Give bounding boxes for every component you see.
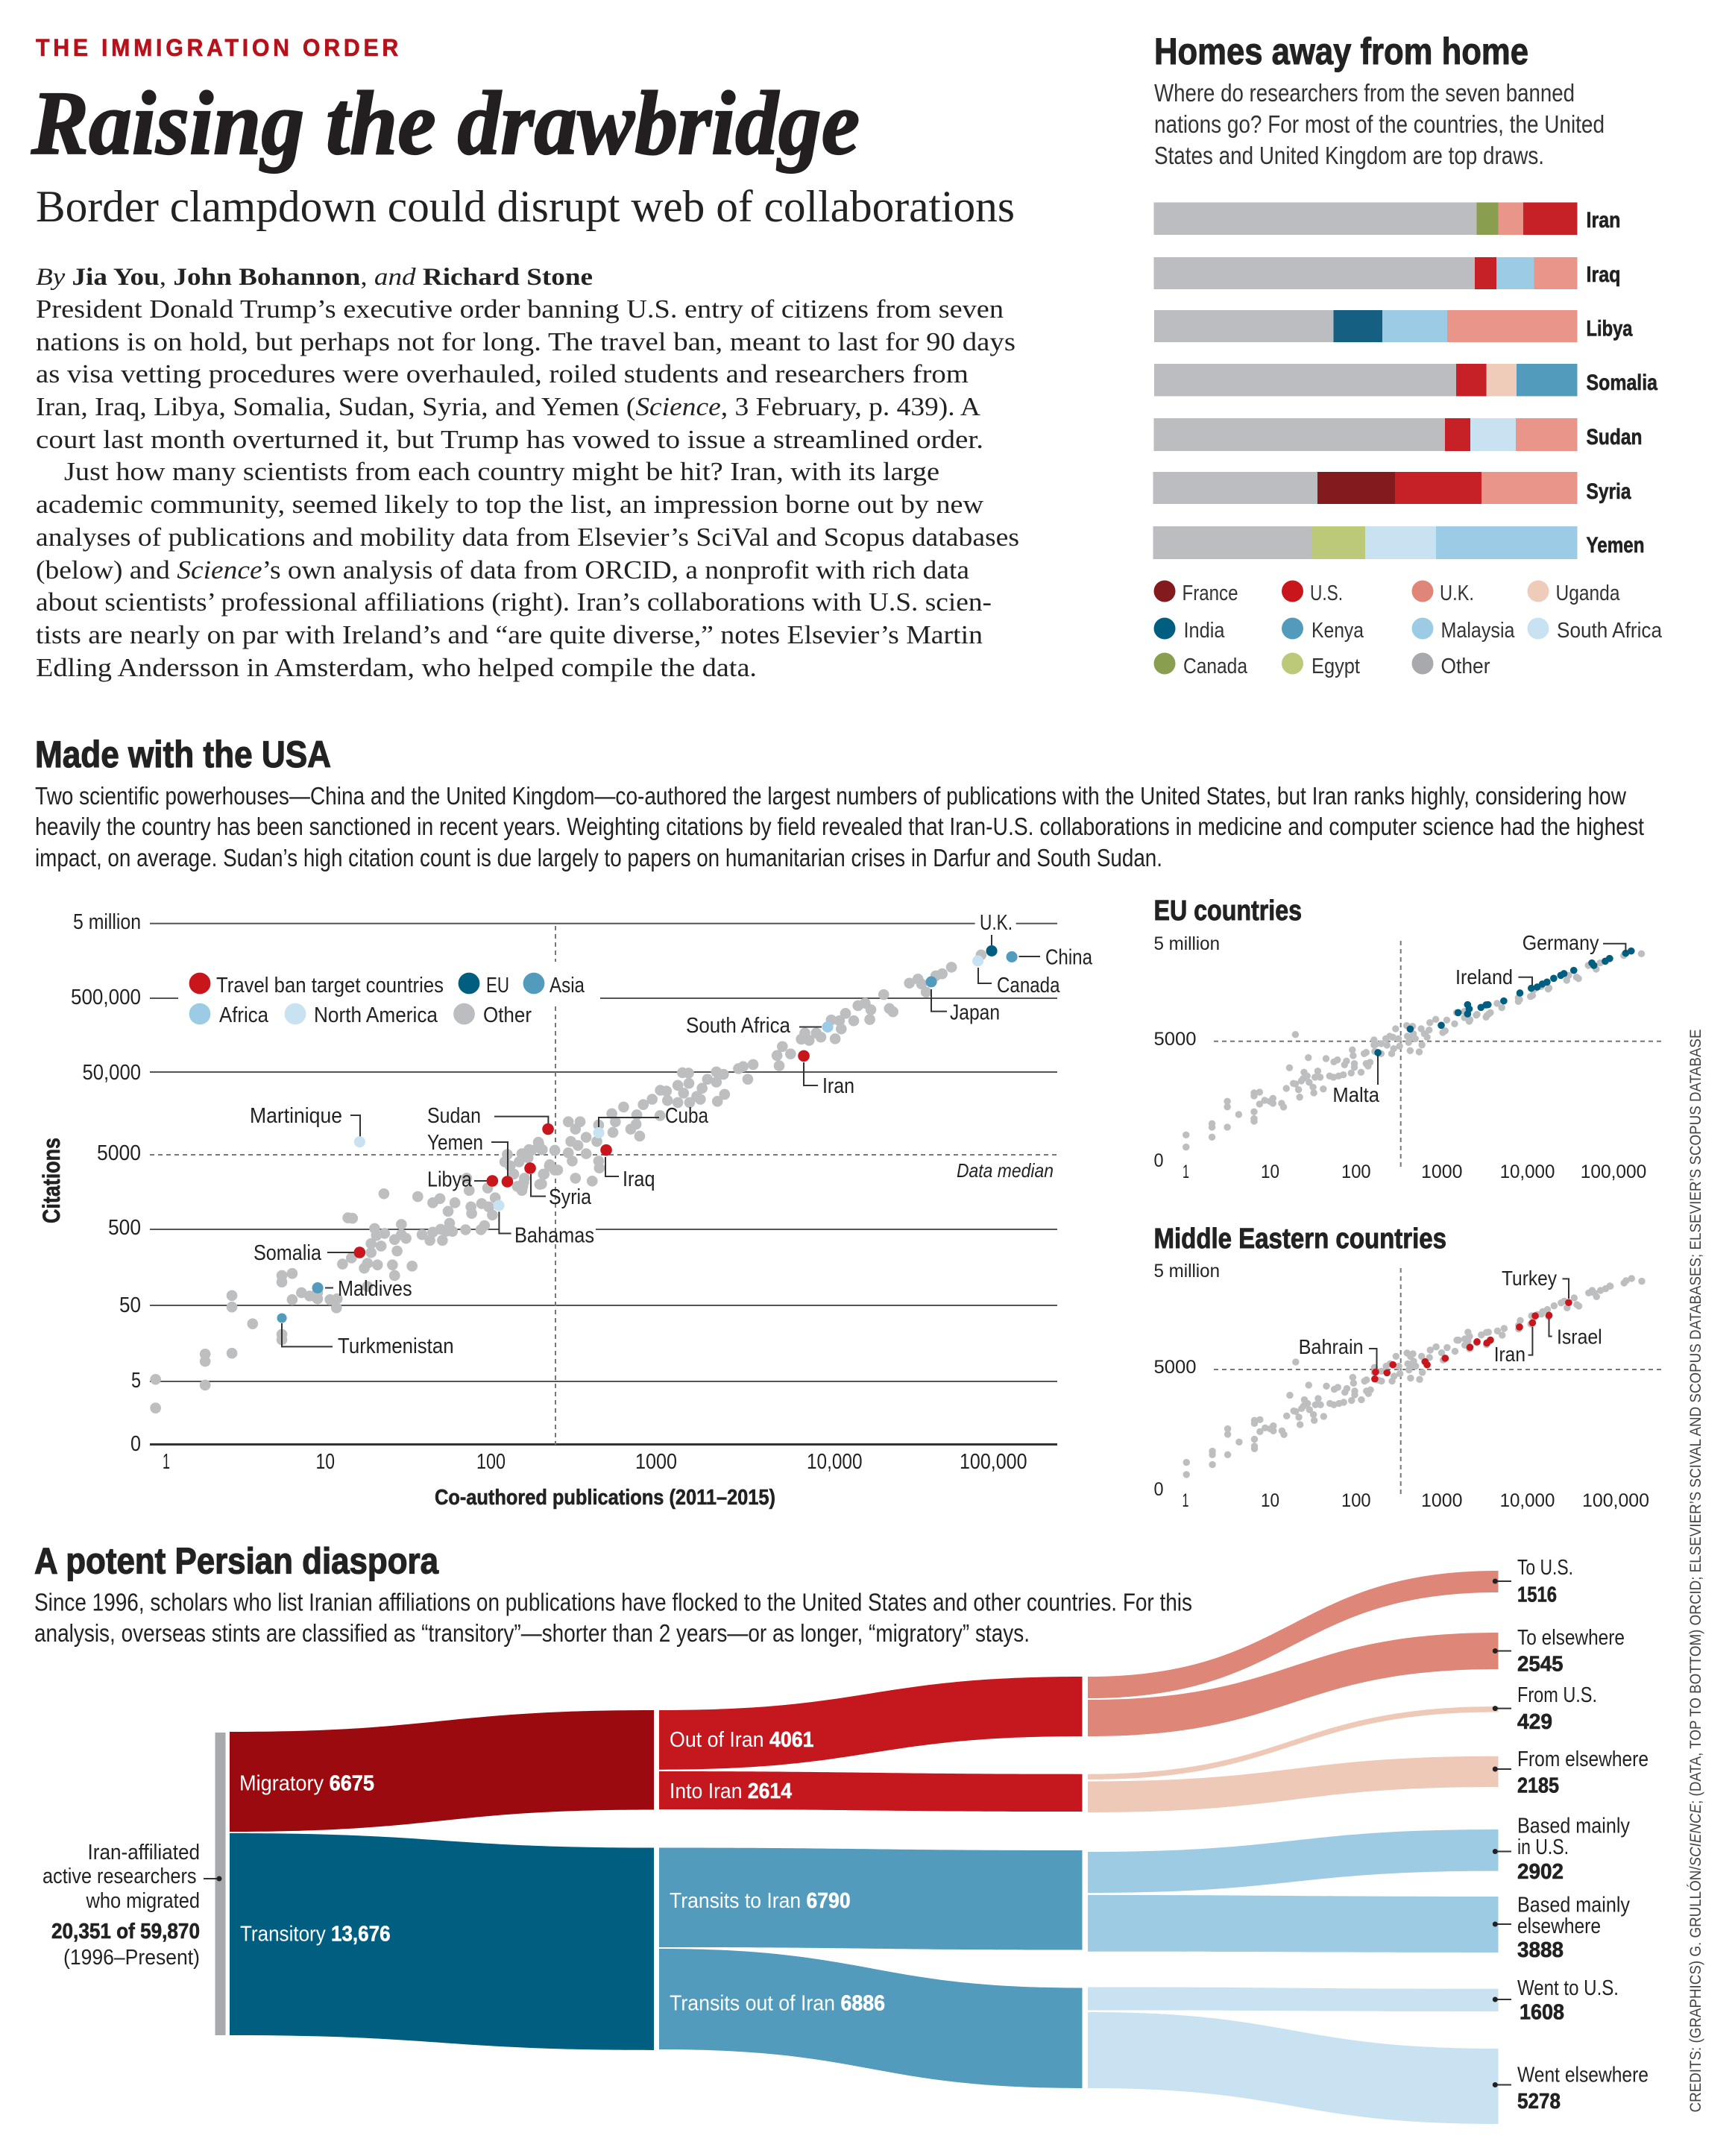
y axis title: Citations [38, 1138, 65, 1223]
stacked bar: Syria [1153, 472, 1631, 504]
points: Asia [318, 957, 1012, 1288]
x axis labels: 100 [476, 1450, 506, 1474]
country labels: Turkey [1502, 1267, 1557, 1290]
description: impact, on average. Sudan’s high citation count is due largely to papers on humanitarian crises in Darfur and South Sudan. [35, 844, 1162, 871]
axis labels: 5000 [1154, 1357, 1196, 1378]
legend: destination countries [1154, 580, 1663, 678]
label: to elsewhere: To elsewhere [1517, 1626, 1625, 1650]
country labels: Maldives [338, 1277, 412, 1301]
EU data points [1378, 951, 1631, 1053]
body text: President Donald Trump’s executive order banning U.S. entry of citizens from seven [36, 294, 1004, 324]
label: based mainly elsewhere: Based mainly [1517, 1894, 1630, 1917]
country labels: Malta [1332, 1083, 1379, 1106]
x axis labels: 10,000 [807, 1450, 862, 1474]
body text: Iran, Iraq, Libya, Somalia, Sudan, Syria, and Yemen ( Science, 3 February, p. 439). A [36, 392, 981, 421]
gray data points: other countries [156, 955, 981, 1408]
legend: North America [314, 1003, 438, 1027]
flow: to elsewhere [1088, 1633, 1499, 1736]
description: States and United Kingdom are top draws. [1154, 142, 1544, 169]
label: from U.S.: 429 [1517, 1710, 1552, 1734]
body text: tists are nearly on par with Ireland’s and “are quite diverse,” notes Elsevier’s Martin [36, 620, 983, 649]
flow labels: Transitory 13,676 [240, 1923, 391, 1947]
x axis title: Co-authored publications (2011–2015) [435, 1486, 775, 1510]
flow: based mainly in U.S. [1088, 1829, 1499, 1893]
axis labels: 5 million [1154, 1261, 1220, 1282]
byline: By Jia You , John Bohannon , and Richard Stone [36, 264, 593, 291]
median lines [1214, 1268, 1662, 1497]
y axis labels: 50 [119, 1293, 141, 1317]
label: to elsewhere: 2545 [1517, 1653, 1563, 1677]
panel: homes away from home [1153, 31, 1663, 678]
label: went elsewhere: 5278 [1517, 2090, 1561, 2114]
country labels: Ireland [1455, 965, 1513, 989]
left annotation: Iran-affiliated [88, 1841, 200, 1865]
stacked bar: Iraq [1154, 257, 1621, 289]
axis labels: 5 million [1154, 933, 1220, 954]
label: from U.S. [1493, 1683, 1597, 1734]
country labels: China [1045, 945, 1093, 969]
axis labels [1154, 1261, 1649, 1511]
heading: Homes away from home [1154, 31, 1528, 72]
left annotation [42, 1841, 222, 1970]
stacked bar: Syria: Syria [1587, 479, 1631, 504]
article header and text [31, 34, 1019, 682]
legend: Travel ban target countries [216, 974, 444, 997]
flow labels: Out of Iran 4061 [670, 1728, 814, 1752]
description: Since 1996, scholars who list Iranian affiliations on publications have flocked to the United States and other countries. For this [34, 1588, 1192, 1616]
country labels: Martinique [250, 1104, 342, 1128]
left annotation: active researchers [42, 1865, 197, 1888]
stacked bar: Iran: Iran [1587, 208, 1621, 233]
label: to elsewhere [1493, 1626, 1625, 1677]
flow: from U.S. [1088, 1706, 1499, 1780]
label: went to U.S.: 1608 [1520, 2001, 1564, 2025]
label: based mainly in U.S. [1493, 1815, 1630, 1884]
flow labels: Migratory 6675 [239, 1771, 374, 1795]
total bar [215, 1733, 225, 2035]
legend: destination countries: Egypt [1312, 655, 1360, 678]
flow: transits out of Iran [659, 1949, 1083, 2088]
axis labels: 10 [1261, 1490, 1279, 1511]
x axis labels: 1000 [635, 1450, 677, 1474]
label: from elsewhere: From elsewhere [1517, 1747, 1649, 1771]
body text: about scientists’ professional affiliations (right). Iran’s collaborations with U.S. scien- [36, 587, 992, 617]
credits: CREDITS: (GRAPHICS) G. GRULLÓN/SCIENCE; (DATA, TOP TO BOTTOM) ORCID; ELSEVIER’S SCIVAL AND SCOPUS DATABASES; ELSEVIER’S SCOPUS DATABASE [1687, 1029, 1704, 2113]
country labels: Yemen [427, 1131, 483, 1155]
legend: Asia [550, 974, 585, 997]
legend: Africa [219, 1003, 269, 1027]
flow labels [239, 1728, 885, 2016]
label: based mainly elsewhere: 3888 [1517, 1938, 1564, 1962]
x axis labels: 10 [316, 1450, 335, 1474]
scatter chart: citations vs co-authored publications [38, 910, 1093, 1510]
legend: destination countries: Uganda [1555, 581, 1620, 605]
flow: transitory [230, 1833, 654, 2050]
legend: destination countries: Canada [1183, 655, 1248, 678]
legend: destination countries: U.K. [1440, 581, 1474, 605]
subtitle: Border clampdown could disrupt web of collaborations [36, 182, 1015, 231]
country labels: Cuba [665, 1104, 709, 1128]
legend: destination countries: Other [1440, 655, 1490, 678]
country labels [250, 911, 1093, 1358]
country labels: Bahrain [1299, 1335, 1364, 1358]
y axis labels: 5000 [97, 1141, 141, 1165]
y axis labels: 5 million [73, 910, 141, 934]
label: based mainly in U.S.: Based mainly [1517, 1815, 1630, 1838]
country labels [1299, 1267, 1602, 1366]
sankey diagram [42, 1556, 1649, 2124]
axis labels: 100 [1341, 1161, 1371, 1182]
section intro: made with the USA [35, 734, 1644, 871]
point: Turkmenistan [277, 1314, 287, 1323]
y axis labels: 5 [131, 1369, 141, 1393]
axis labels: 5000 [1154, 1029, 1196, 1050]
label: went to U.S. [1493, 1976, 1619, 2025]
heading: A potent Persian diaspora [34, 1542, 439, 1582]
legend: destination countries: South Africa [1557, 619, 1663, 643]
country labels: Germany [1523, 931, 1599, 954]
median lines [1214, 941, 1662, 1169]
label: to U.S. [1493, 1556, 1573, 1607]
gray data points [1186, 954, 1641, 1147]
label: from elsewhere: 2185 [1517, 1774, 1559, 1798]
left annotation: (1996–Present) [63, 1946, 200, 1970]
stacked bar: Sudan [1154, 418, 1642, 451]
grid lines [150, 924, 1057, 1445]
small chart: EU countries [1154, 895, 1662, 1182]
legend: Other [483, 1003, 532, 1027]
axis labels: 1 [1183, 1490, 1188, 1511]
stacked bar: Libya [1154, 310, 1633, 342]
axis labels [1154, 933, 1646, 1182]
country labels: Iran [1494, 1343, 1525, 1366]
legend: destination countries: Malaysia [1440, 619, 1515, 643]
country labels: Bahamas [514, 1224, 594, 1248]
heading: Made with the USA [35, 734, 331, 775]
body text: Edling Andersson in Amsterdam, who helped compile the data. [36, 653, 757, 682]
stacked bar: Iraq: Iraq [1587, 262, 1621, 287]
label: from U.S.: From U.S. [1517, 1683, 1597, 1707]
point: South Africa [822, 1021, 834, 1033]
axis labels: 1 [1183, 1161, 1189, 1182]
country labels: Turkmenistan [338, 1334, 454, 1358]
legend: destination countries: Kenya [1312, 619, 1364, 643]
axis labels: 0 [1154, 1150, 1163, 1171]
body text: nations is on hold, but perhaps not for long. The travel ban, meant to last for 90 days [36, 327, 1016, 356]
stacked bar: Libya: Libya [1587, 316, 1633, 341]
description [34, 1588, 1192, 1647]
label: based mainly in U.S.: 2902 [1517, 1860, 1564, 1884]
axis labels: 1000 [1421, 1161, 1463, 1182]
legend [189, 973, 585, 1027]
axis labels: 0 [1154, 1479, 1163, 1500]
flow labels: Transits to Iran 6790 [670, 1889, 851, 1913]
title: Raising the drawbridge [31, 73, 860, 174]
country labels: South Africa [686, 1014, 791, 1038]
flow: transits to Iran [659, 1847, 1083, 1950]
label: went elsewhere [1493, 2064, 1649, 2114]
country labels: Canada [997, 974, 1060, 997]
label: to U.S.: 1516 [1517, 1583, 1557, 1607]
leader lines [1378, 944, 1625, 1085]
label: based mainly elsewhere [1493, 1894, 1630, 1962]
stacked bar: Sudan: Sudan [1587, 425, 1642, 450]
x axis labels: 100,000 [960, 1450, 1027, 1474]
body text: (below) and Science’s own analysis of data from ORCID, a nonprofit with rich data [36, 555, 969, 584]
legend: destination countries: India [1184, 619, 1225, 643]
flow: out of Iran [659, 1677, 1083, 1770]
stacked bar: Iran [1154, 203, 1621, 235]
y axis labels: 500 [108, 1216, 141, 1240]
body text [36, 294, 1019, 682]
leader lines [1369, 1279, 1569, 1369]
country labels: Iran [822, 1074, 854, 1098]
description: analysis, overseas stints are classified as “transitory”—shorter than 2 years—or as longer, “migratory” stays. [34, 1619, 1030, 1647]
points: North America [359, 961, 978, 1205]
body text: as visa vetting procedures were overhauled, roiled students and researchers from [36, 359, 969, 388]
country labels: Sudan [427, 1104, 481, 1128]
flow: based mainly elsewhere [1088, 1895, 1499, 1952]
heading: EU countries [1154, 895, 1302, 927]
label: based mainly in U.S.: in U.S. [1517, 1835, 1569, 1859]
x axis labels [163, 1450, 1027, 1474]
heading: Middle Eastern countries [1154, 1223, 1446, 1255]
flow: to U.S. [1088, 1571, 1499, 1698]
country labels: Data median [957, 1159, 1054, 1182]
stacked bar: Somalia [1154, 364, 1657, 397]
axis labels: 100,000 [1582, 1490, 1649, 1511]
body text: analyses of publications and mobility data from Elsevier’s SciVal and Scopus databases [36, 523, 1019, 552]
flow: migratory [230, 1710, 654, 1832]
legend: EU [486, 974, 509, 997]
left annotation: who migrated [86, 1889, 200, 1913]
axis labels: 1000 [1421, 1490, 1463, 1511]
body text: academic community, seemed likely to top the list, an impression borne out by new [36, 490, 984, 519]
points: travel ban target countries [359, 1056, 804, 1252]
stacked bar: Yemen [1153, 526, 1645, 559]
flow labels: Into Iran 2614 [670, 1780, 792, 1803]
kicker: THE IMMIGRATION ORDER [36, 34, 402, 61]
country labels: Libya [427, 1167, 473, 1191]
country labels [1332, 931, 1599, 1106]
country labels: Syria [549, 1185, 592, 1209]
legend: destination countries: U.S. [1310, 581, 1343, 605]
gray data points [1186, 1279, 1642, 1475]
label: from elsewhere [1493, 1747, 1649, 1798]
description [1154, 79, 1605, 169]
country labels: Japan [950, 1001, 1000, 1025]
label: went to U.S.: Went to U.S. [1517, 1976, 1619, 2000]
highlighted data points [282, 951, 1012, 1318]
point: U.K. [986, 945, 998, 956]
Middle Eastern data points [1375, 1302, 1569, 1379]
stacked bar: Somalia: Somalia [1587, 371, 1657, 395]
axis labels: 100 [1341, 1490, 1371, 1511]
flow: went to U.S. [1088, 1988, 1499, 2011]
left annotation: 20,351 of 59,870 [51, 1920, 200, 1944]
axis labels: 100,000 [1581, 1161, 1646, 1182]
y axis labels: 500,000 [71, 986, 141, 1009]
section: a potent Persian diaspora [34, 1542, 1649, 2124]
axis labels: 10 [1261, 1161, 1279, 1182]
flow: went elsewhere [1088, 2012, 1499, 2124]
label: to U.S.: To U.S. [1517, 1556, 1573, 1580]
flow: into Iran [659, 1771, 1083, 1812]
description: Where do researchers from the seven banned [1154, 79, 1575, 107]
body text: Just how many scientists from each country might be hit? Iran, with its large [64, 457, 939, 486]
description: nations go? For most of the countries, the United [1154, 110, 1605, 138]
country labels: U.K. [980, 911, 1013, 935]
axis labels: 10,000 [1500, 1161, 1555, 1182]
y axis labels: 50,000 [82, 1061, 141, 1085]
country labels: Israel [1557, 1326, 1602, 1348]
label: went elsewhere: Went elsewhere [1517, 2064, 1649, 2087]
y axis labels [71, 910, 141, 1456]
flow: from elsewhere [1088, 1756, 1499, 1812]
leader lines [282, 935, 1040, 1346]
country labels: Somalia [254, 1241, 322, 1265]
y axis labels: 0 [130, 1432, 141, 1456]
label: based mainly elsewhere: elsewhere [1517, 1914, 1601, 1938]
axis labels: 10,000 [1500, 1490, 1555, 1511]
flow labels: Transits out of Iran 6886 [670, 1992, 885, 2016]
legend: destination countries: France [1183, 581, 1238, 605]
body text: court last month overturned it, but Trump has vowed to issue a streamlined order. [36, 425, 983, 454]
country labels: Iraq [623, 1167, 655, 1191]
stacked bar: Yemen: Yemen [1587, 533, 1645, 558]
description [35, 782, 1644, 871]
small chart: Middle Eastern countries [1154, 1223, 1662, 1511]
x axis labels: 1 [163, 1450, 170, 1474]
